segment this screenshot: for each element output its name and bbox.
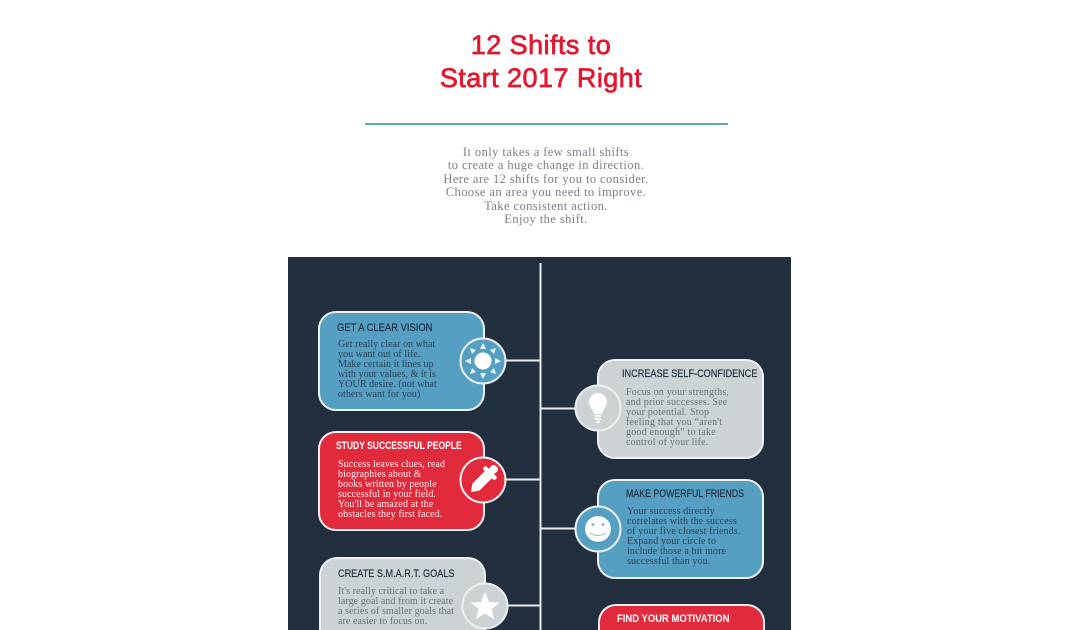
card: study successful people [318,431,484,531]
intro text: Here are 12 shifts for you to consider. [443,172,649,186]
card: increase self-confidence [597,359,764,459]
title divider [365,123,728,125]
heading: FIND YOUR MOTIVATION [617,613,729,625]
title: Start 2017 Right [440,63,642,93]
body text: your potential. Stop [626,407,709,418]
body text: feeling that you “aren't [626,417,722,428]
body text: biographies about & [338,469,422,480]
card: create smart goals [319,557,486,630]
heading: STUDY SUCCESSFUL PEOPLE [336,440,462,452]
heading: GET A CLEAR VISION [337,322,432,334]
body text: Make certain it lines up [338,359,434,370]
body text: Your success directly [627,506,715,517]
timeline spine and connectors [506,263,575,630]
body text: correlates with the success [627,516,737,527]
heading: MAKE POWERFUL FRIENDS [626,488,744,500]
body text [338,586,454,627]
body text [338,339,437,400]
icon: star [462,582,508,630]
body text: with your values, & it is [338,369,436,380]
intro text: It only takes a few small shifts [463,145,629,159]
body text: you want out of life. [338,349,420,360]
body text: are easier to focus on. [338,616,427,627]
body text: Success leaves clues, read [338,459,445,470]
body text: a series of smaller goals that [338,606,454,617]
body text [627,506,740,567]
intro text [443,145,649,226]
icon: light bulb [574,384,622,432]
intro text: Enjoy the shift. [504,212,588,226]
body text: successful than you. [627,556,710,567]
body text: and prior successes. See [626,397,727,408]
title: 12 Shifts to [471,30,611,60]
card: make powerful friends [597,479,764,579]
card: find your motivation [598,604,764,630]
body text: Get really clear on what [338,339,435,350]
body text: large goal and from it create [338,596,453,607]
body text: include those a bit more [627,546,726,557]
heading: INCREASE SELF-CONFIDENCE [622,368,757,380]
body text: others want for you) [338,389,420,400]
body text [626,387,729,448]
body text [338,459,445,520]
icon: smiley [574,506,622,552]
panel: timeline of shifts [288,257,791,630]
intro text: to create a huge change in direction. [448,158,644,172]
title [440,30,642,93]
heading: CREATE S.M.A.R.T. GOALS [338,568,455,580]
body text: You'll be amazed at the [338,499,433,510]
card: get a clear vision [318,311,484,411]
body text: of your five closest friends. [627,526,740,537]
body text: It's really critical to take a [338,586,444,597]
body text: Expand your circle to [627,536,716,547]
body text: obstacles they first faced. [338,509,442,520]
body text: good enough” to take [626,427,716,438]
body text: books written by people [338,479,437,490]
body text: YOUR desire. (not what [338,379,437,390]
icon: sun [460,338,506,384]
intro text: Take consistent action. [484,199,608,213]
intro text: Choose an area you need to improve. [446,185,646,199]
icon: dropper [460,456,506,504]
body text: successful in your field. [338,489,436,500]
body text: control of your life. [626,437,709,448]
body text: Focus on your strengths, [626,387,729,398]
